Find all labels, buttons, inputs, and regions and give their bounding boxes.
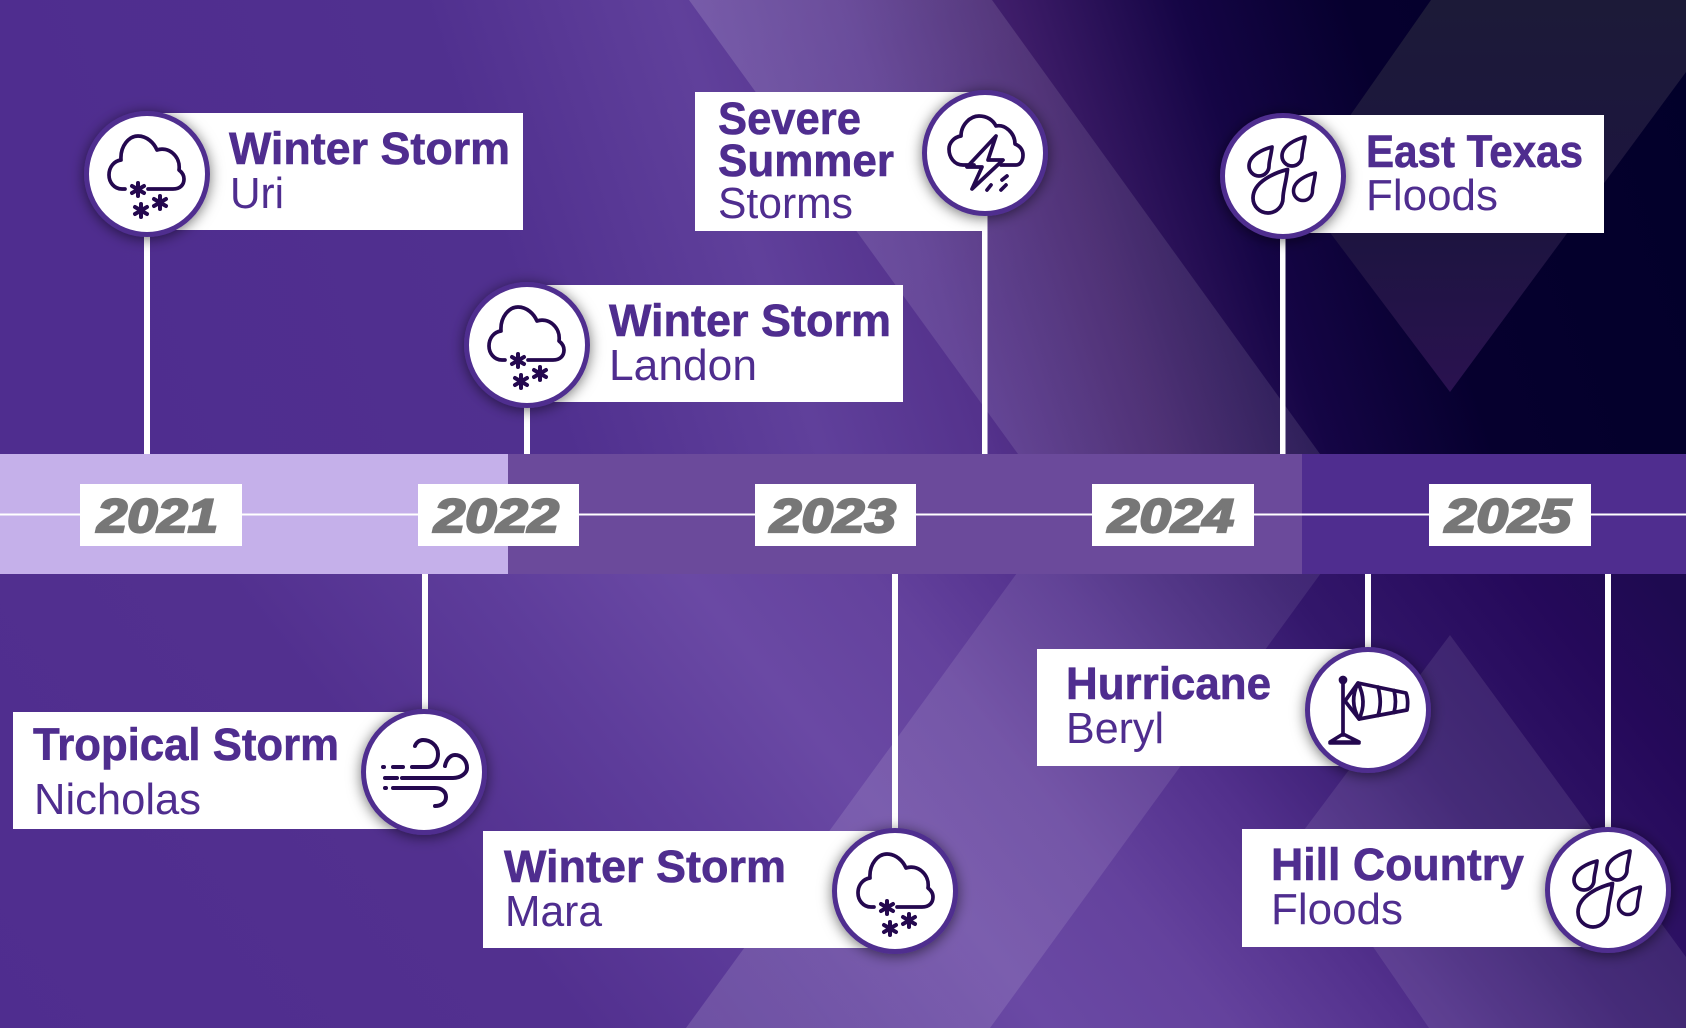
year 2025	[1429, 484, 1591, 546]
timeline band	[0, 454, 1686, 574]
event name: Floods	[1366, 171, 1498, 220]
connector line	[1280, 233, 1286, 454]
icon: rain drops	[1574, 851, 1640, 927]
event: Hurricane Beryl	[1037, 574, 1428, 770]
event title: Hill Country	[1271, 839, 1524, 890]
icon badge	[86, 114, 208, 234]
label card	[1283, 115, 1604, 233]
connector line	[1605, 574, 1611, 832]
label card	[13, 712, 425, 829]
icon: snow cloud	[489, 307, 564, 388]
icon badge	[1548, 830, 1668, 950]
event: Hill Country Floods	[1242, 574, 1668, 950]
year 2023	[755, 484, 916, 546]
band segment: dark	[1302, 454, 1686, 574]
timeline axis line	[0, 514, 1686, 516]
event: Winter Storm Landon	[466, 284, 903, 454]
event name: Landon	[609, 341, 757, 390]
band segment: light	[0, 454, 508, 574]
label card	[483, 831, 894, 948]
connector line	[524, 402, 530, 454]
icon badge	[1222, 116, 1344, 236]
icon: windsock	[1330, 678, 1408, 743]
event: Severe Summer Storms	[695, 92, 1046, 454]
icon badge	[924, 92, 1046, 214]
label card	[1037, 649, 1368, 766]
event name: Floods	[1271, 885, 1403, 934]
year 2023: 2023	[769, 489, 896, 542]
event title: Winter Storm	[504, 841, 786, 892]
year 2021	[80, 484, 242, 546]
background: lower right chevron	[1298, 635, 1686, 1028]
icon: snow cloud	[109, 136, 184, 217]
icon: snow cloud	[858, 854, 933, 935]
icon badge	[466, 284, 588, 406]
icon badge	[1308, 650, 1428, 770]
event title: East Texas	[1366, 126, 1583, 177]
icon badge	[364, 712, 484, 832]
event title line 1: Severe	[718, 93, 861, 144]
connector line	[422, 574, 428, 714]
label card	[695, 92, 982, 231]
label card	[147, 113, 523, 230]
event title: Hurricane	[1066, 658, 1271, 709]
event title: Tropical Storm	[33, 719, 339, 770]
icon badge	[834, 830, 956, 952]
connector line	[892, 574, 898, 834]
background: lower gradient	[0, 572, 1686, 1028]
event: Winter Storm Uri	[86, 113, 523, 454]
connector line	[144, 230, 150, 454]
connector line	[1365, 574, 1371, 654]
band segment: medium	[508, 454, 1302, 574]
year 2022	[418, 484, 579, 546]
year 2024	[1092, 484, 1254, 546]
connector line	[982, 153, 988, 454]
label card	[1242, 829, 1608, 947]
event title: Winter Storm	[609, 295, 891, 346]
background: upper light diagonal	[689, 0, 1320, 454]
event name: Nicholas	[34, 775, 201, 824]
event: Winter Storm Mara	[483, 574, 956, 952]
year 2021: 2021	[96, 489, 218, 542]
event name: Beryl	[1066, 704, 1164, 753]
background: upper right chevron	[1298, 0, 1686, 392]
event: East Texas Floods	[1222, 115, 1604, 454]
label card	[527, 285, 903, 402]
event name: Mara	[505, 887, 603, 936]
event: Tropical Storm Nicholas	[13, 574, 484, 832]
background: lower light diagonal	[686, 573, 1321, 1028]
year 2025: 2025	[1444, 489, 1572, 542]
year 2024: 2024	[1107, 489, 1234, 542]
event title line 2: Summer	[718, 135, 894, 186]
icon: wind	[383, 740, 467, 806]
background: upper gradient	[0, 0, 1686, 456]
event title: Winter Storm	[229, 123, 510, 174]
icon: rain drops	[1249, 137, 1315, 213]
event name: Storms	[718, 179, 853, 228]
event name: Uri	[230, 169, 284, 218]
icon: thunderstorm	[949, 116, 1023, 190]
year 2022: 2022	[433, 489, 559, 542]
